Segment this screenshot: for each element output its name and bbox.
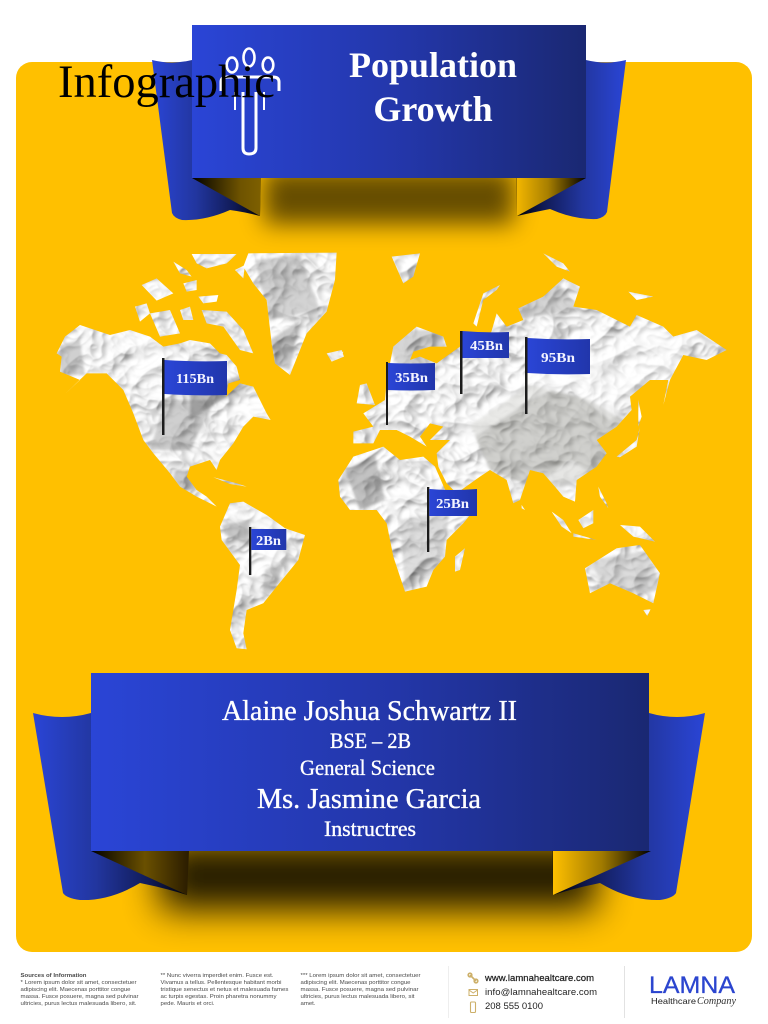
flag: 95Bn bbox=[525, 337, 590, 414]
logo: Lamna Healthcare Company: LAMNA bbox=[649, 972, 736, 999]
footer: sources column 2 bbox=[160, 973, 289, 1007]
footer: sources column 3: adipiscing elit. Maecenas porttitor congue bbox=[300, 980, 410, 986]
contact: email: info@lamnahealtcare.com bbox=[485, 987, 597, 998]
footer: sources column 1: Sources of Information bbox=[20, 973, 87, 979]
footer: sources column 1: adipiscing elit. Maecenas porttitor congue bbox=[20, 987, 130, 993]
flag: 2Bn bbox=[249, 527, 286, 575]
student name: Alaine Joshua Schwartz II bbox=[222, 695, 517, 727]
flag: 2Bn: 2Bn bbox=[256, 534, 281, 549]
flag: 25Bn bbox=[427, 487, 477, 552]
flag: 25Bn: 25Bn bbox=[436, 497, 469, 512]
world map: crumpled paper bbox=[40, 240, 740, 660]
footer: sources column 2: Vivamus a tellus. Pellentesque habitant morbi bbox=[160, 980, 282, 986]
title: Growth bbox=[373, 89, 493, 129]
contact: phone: 208 555 0100 bbox=[485, 1001, 543, 1012]
icon: phone bbox=[470, 1002, 476, 1012]
footer: sources column 2: pede. Mauris et orci. bbox=[160, 1001, 215, 1007]
instructor role: Instructres bbox=[324, 816, 416, 841]
section: BSE – 2B bbox=[330, 728, 411, 753]
logo: Lamna Healthcare Company: Company bbox=[697, 996, 737, 1007]
footer: sources column 2: tristique senectus et netus et malesuada fames bbox=[160, 987, 289, 993]
icon: mail bbox=[469, 990, 478, 996]
footer: sources column 1: * Lorem ipsum dolor sit amet, consectetuer bbox=[20, 980, 137, 986]
footer: sources column 3: massa. Fusce posuere, magna sed pulvinar bbox=[300, 987, 419, 993]
instructor name: Ms. Jasmine Garcia bbox=[257, 784, 481, 815]
footer: sources column 3: *** Lorem ipsum dolor sit amet, consectetuer bbox=[300, 973, 421, 979]
icon: link bbox=[468, 973, 478, 983]
footer: sources column 1: ultricies, purus lectus malesuada libero, sit. bbox=[20, 1001, 137, 1007]
footer: sources column 1: massa. Fusce posuere, magna sed pulvinar bbox=[20, 994, 139, 1000]
icon: group of people bbox=[221, 48, 279, 154]
flag: 95Bn: 95Bn bbox=[541, 351, 575, 366]
flag: 35Bn: 35Bn bbox=[395, 371, 428, 386]
logo: Lamna Healthcare Company: Healthcare bbox=[651, 996, 696, 1006]
top ribbon banner bbox=[152, 25, 626, 224]
footer: sources column 3 bbox=[300, 973, 421, 1007]
bottom ribbon banner bbox=[33, 673, 705, 910]
title: Population bbox=[349, 45, 517, 85]
flag: 115Bn bbox=[162, 358, 227, 435]
footer: sources column 2: ac turpis egestas. Proin pharetra nonummy bbox=[160, 994, 277, 1000]
footer: sources column 1 bbox=[20, 973, 139, 1007]
footer: sources column 3: ultricies, purus lectus malesuada libero, sit bbox=[300, 994, 415, 1000]
flag: 35Bn bbox=[386, 362, 435, 425]
flag: 115Bn: 115Bn bbox=[176, 372, 214, 387]
heading: Infographic: Infographic bbox=[58, 57, 275, 108]
contact: website: www.lamnahealtcare.com bbox=[484, 973, 594, 984]
footer: sources column 2: ** Nunc viverra imperdiet enim. Fusce est. bbox=[160, 973, 274, 979]
flag: 45Bn bbox=[460, 331, 509, 394]
footer: sources column 3: amet. bbox=[300, 1001, 316, 1007]
subject: General Science bbox=[300, 755, 435, 780]
flag: 45Bn: 45Bn bbox=[470, 339, 503, 354]
